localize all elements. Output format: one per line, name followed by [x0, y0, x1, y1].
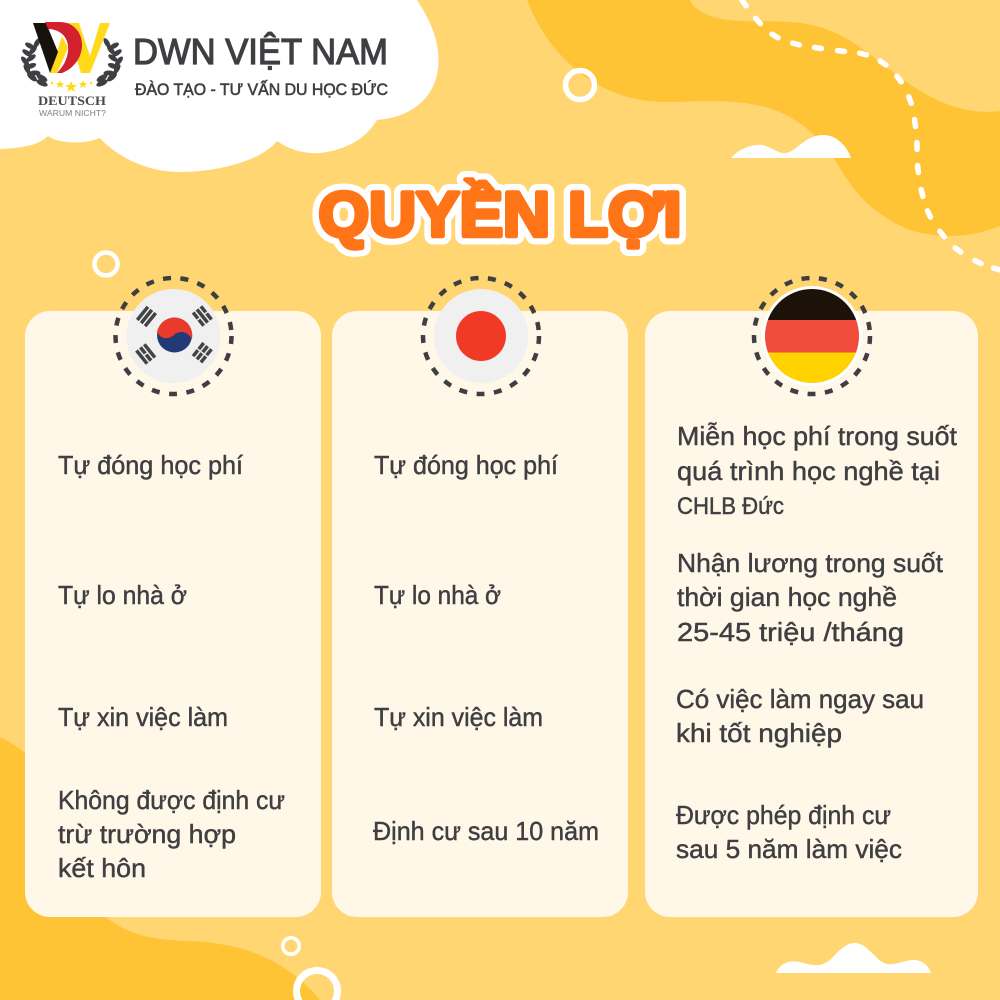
panel: Germany	[645, 311, 978, 917]
Germany item 4: Được phép định cư	[676, 800, 891, 830]
Germany item 4: sau 5 năm làm việc	[676, 834, 902, 864]
Japan item 2: Tự lo nhà ở	[374, 580, 501, 610]
Germany item 2	[677, 548, 944, 647]
Korea item 4: trừ trường hợp	[58, 819, 236, 849]
Korea item 3: Tự xin việc làm	[58, 702, 228, 732]
icon: Korea flag	[116, 278, 232, 394]
decorative dashed route	[742, 0, 1000, 270]
logo stars	[51, 80, 92, 92]
title: QUYỀN LỢI	[318, 179, 682, 250]
Germany item 2: 25-45 triệu /tháng	[677, 617, 904, 647]
title: QUYỀN LỢI	[318, 179, 682, 250]
background blob: bottom left	[0, 737, 320, 1000]
Korea item 4: kết hôn	[58, 853, 146, 883]
Germany item 1	[677, 421, 958, 520]
Germany item 2: Nhận lương trong suốt	[677, 548, 944, 578]
Germany item 4	[676, 800, 902, 864]
Germany item 3	[676, 684, 924, 748]
panel: Japan	[332, 311, 628, 917]
cloud: bottom right	[776, 943, 931, 973]
logo tagline: WARUM NICHT?	[39, 108, 106, 118]
Germany item 3: Có việc làm ngay sau	[676, 684, 924, 714]
cloud: top right	[731, 135, 851, 158]
Germany item 1: quá trình học nghề tại	[677, 456, 940, 486]
Germany item 2: thời gian học nghề	[677, 582, 897, 612]
icon: Japan flag	[423, 278, 539, 394]
logo mark	[20, 22, 124, 118]
decorative rings	[94, 70, 594, 1000]
header cloud with logo	[0, 0, 439, 172]
Japan item 3: Tự xin việc làm	[374, 702, 543, 732]
brand slogan: ĐÀO TẠO - TƯ VẤN DU HỌC ĐỨC	[135, 80, 388, 99]
Japan item 1: Tự đóng học phí	[374, 450, 559, 480]
Germany item 1: Miễn học phí trong suốt	[677, 421, 958, 451]
Korea item 4: Không được định cư	[58, 785, 285, 815]
Korea item 1: Tự đóng học phí	[58, 450, 244, 480]
icon: Germany flag	[754, 278, 870, 394]
Germany item 1: CHLB Đức	[677, 493, 784, 520]
logo laurel	[20, 37, 124, 88]
brand name: DWN VIỆT NAM	[133, 31, 388, 72]
logo letters DW	[33, 22, 110, 73]
Korea item 4	[58, 785, 285, 883]
Germany item 3: khi tốt nghiệp	[676, 718, 842, 748]
Japan item 4: Định cư sau 10 năm	[373, 816, 599, 846]
panel: Korea	[25, 311, 321, 917]
logo wordmark: DEUTSCH	[38, 93, 106, 108]
Korea item 2: Tự lo nhà ở	[58, 580, 187, 610]
background blob: top right	[527, 0, 1000, 236]
